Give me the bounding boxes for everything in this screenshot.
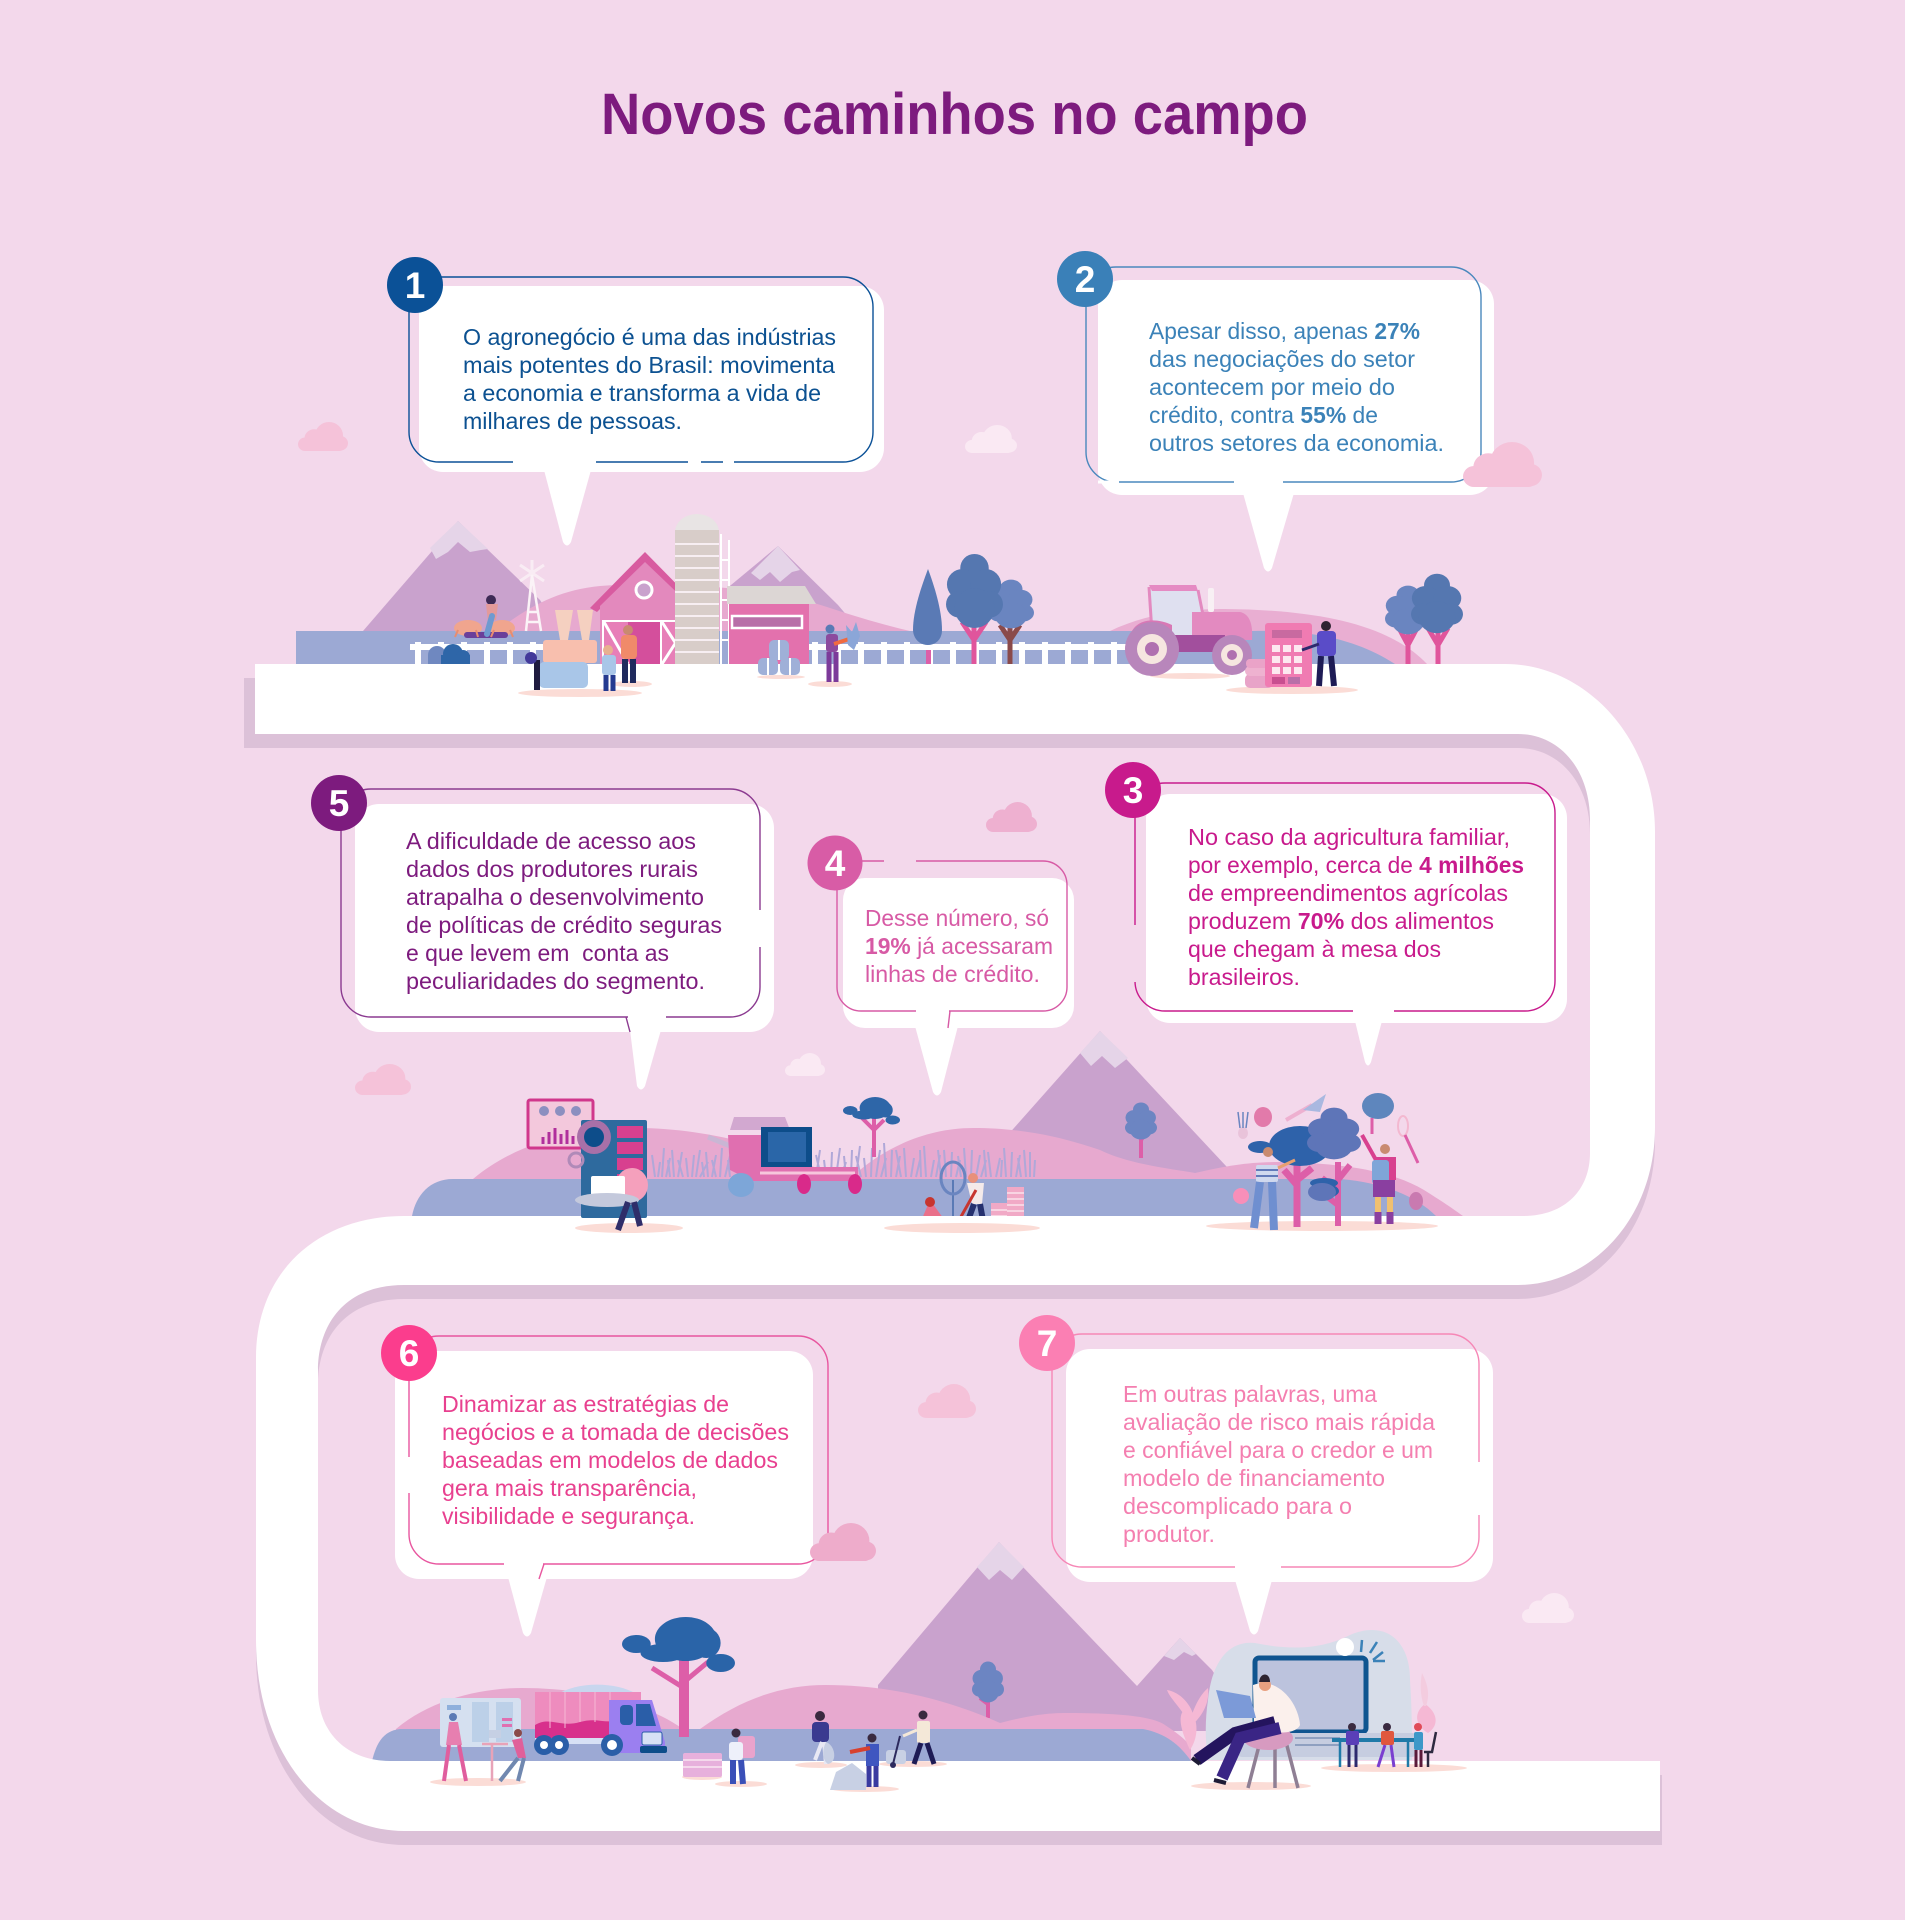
- callout text: produzem 70% dos alimentos: [1188, 908, 1494, 934]
- number badge: [381, 1325, 437, 1381]
- callout text: por exemplo, cerca de 4 milhões: [1188, 852, 1524, 878]
- cloud over callout 2: [1463, 442, 1542, 487]
- hay bales: [758, 640, 800, 675]
- bubble outline: [837, 861, 1067, 1011]
- callout text: 19% já acessaram: [865, 933, 1053, 959]
- bubble outline: [409, 1336, 828, 1564]
- pigs and woman: [454, 595, 515, 638]
- bubble tail: [915, 1026, 958, 1096]
- callout text: a economia e transforma a vida de: [463, 380, 821, 406]
- callout text: Em outras palavras, uma: [1123, 1381, 1378, 1407]
- bubble tail: [630, 1030, 661, 1090]
- callout text: [463, 324, 836, 434]
- number badge: [1105, 762, 1161, 818]
- bubble outline: [341, 789, 760, 1017]
- cloud over callout 6: [810, 1523, 876, 1561]
- crate and worker: [683, 1728, 755, 1784]
- hill behind tractor: [1110, 609, 1427, 664]
- callout text: e que levem em conta as: [406, 940, 669, 966]
- callout text: O agronegócio é uma das indústrias: [463, 324, 836, 350]
- figures scene 2: data center: [528, 1100, 648, 1230]
- callout text: gera mais transparência,: [442, 1475, 697, 1501]
- tail notch: [539, 1564, 544, 1579]
- outline gaps: [1098, 480, 1283, 484]
- callout text: das negociações do setor: [1149, 346, 1415, 372]
- callout text: negócios e a tomada de decisões: [442, 1419, 789, 1445]
- figures scene 1: milk machine and workers: [525, 610, 637, 691]
- landscape scene 2: fields: [412, 1031, 1463, 1230]
- number badge: [1057, 251, 1113, 307]
- callout text: [1123, 1381, 1436, 1547]
- number badge: 2: [1075, 259, 1095, 300]
- callout text: Desse número, só: [865, 905, 1049, 931]
- callout text: Apesar disso, apenas 27%: [1149, 318, 1420, 344]
- callout text: e confiável para o credor e um: [1123, 1437, 1433, 1463]
- number badge: 4: [825, 843, 846, 884]
- callout text: produtor.: [1123, 1521, 1215, 1547]
- monitor: [1255, 1638, 1385, 1732]
- blob behind laptop man: [1206, 1630, 1412, 1760]
- outline gaps: [1235, 1462, 1479, 1567]
- callout text: visibilidade e segurança.: [442, 1503, 695, 1529]
- number badge: 1: [405, 265, 425, 306]
- landscape scene 1: farm: [296, 514, 1463, 664]
- callout text: Dinamizar as estratégias de: [442, 1391, 729, 1417]
- bubble tail: [544, 470, 591, 546]
- number badge: [387, 257, 443, 313]
- bush: [428, 644, 470, 664]
- board: [440, 1698, 521, 1747]
- number badge: 6: [399, 1333, 419, 1374]
- callout text: [406, 828, 722, 994]
- bubble body: [1098, 280, 1494, 495]
- bubble body: [355, 804, 774, 1032]
- callout text: [1149, 318, 1444, 456]
- callout text: de políticas de crédito seguras: [406, 912, 722, 938]
- orchard trees and pickers: [1248, 1108, 1396, 1230]
- silo: [675, 514, 729, 664]
- team table: [1332, 1723, 1436, 1767]
- outline gaps: [409, 1457, 543, 1564]
- callout text: [442, 1391, 789, 1529]
- bubble outline: [409, 277, 873, 462]
- ground band: [372, 1729, 1191, 1761]
- mountain: [990, 1031, 1240, 1179]
- keyboard: [1238, 1733, 1416, 1757]
- title: Novos caminhos no campo: [601, 82, 1308, 147]
- hills: [396, 1685, 1191, 1761]
- callout text: outros setores da economia.: [1149, 430, 1444, 456]
- bubble outline: [1052, 1334, 1479, 1567]
- windmill: [520, 560, 544, 631]
- bottom gap: [1353, 1010, 1394, 1012]
- callout text: brasileiros.: [1188, 964, 1300, 990]
- outline gaps: [884, 860, 916, 862]
- callout text: que chegam à mesa dos: [1188, 936, 1441, 962]
- callout text: milhares de pessoas.: [463, 408, 682, 434]
- ground shadows under figures: [430, 673, 1467, 1792]
- ground band: [296, 631, 1395, 664]
- number badge: [808, 836, 862, 890]
- bottom gap: [916, 1010, 949, 1012]
- orchard hill fruit: [1233, 1093, 1423, 1210]
- callout text: modelo de financiamento: [1123, 1465, 1385, 1491]
- callout text: [1188, 824, 1524, 990]
- barn: [590, 552, 700, 664]
- callout text: crédito, contra 55% de: [1149, 402, 1378, 428]
- mountain left: [363, 521, 560, 631]
- bubble tail: [508, 1577, 547, 1636]
- side barn: [727, 586, 816, 664]
- callout text: atrapalha o desenvolvimento: [406, 884, 704, 910]
- ground band: [412, 1179, 1436, 1216]
- bubble body: [1146, 794, 1567, 1023]
- callout 7: [1019, 1315, 1493, 1634]
- outline gaps: [513, 460, 734, 464]
- callout text: peculiaridades do segmento.: [406, 968, 705, 994]
- callout text: acontecem por meio do: [1149, 374, 1395, 400]
- callout 2: [1057, 251, 1494, 572]
- callout 4: [808, 836, 1074, 1096]
- bubble body: [843, 878, 1074, 1028]
- bubble tail: [1243, 493, 1294, 572]
- mountain right: [725, 546, 860, 631]
- road: [255, 664, 1660, 1831]
- number badge: [311, 775, 367, 831]
- road shadow: [244, 678, 1662, 1845]
- callout text: [865, 905, 1053, 987]
- hill behind barn: [497, 584, 910, 631]
- small tree: [972, 1662, 1004, 1718]
- bubble body: [1066, 1349, 1493, 1582]
- landscape scene 3: logistics: [372, 1542, 1416, 1761]
- calculator and investor: [1245, 621, 1336, 688]
- callout text: de empreendimentos agrícolas: [1188, 880, 1508, 906]
- tail notch: [626, 1017, 630, 1032]
- tree pair: [946, 554, 1034, 664]
- callout 3: [1105, 762, 1567, 1066]
- callout text: descomplicado para o: [1123, 1493, 1352, 1519]
- bubble tail: [1355, 1021, 1382, 1066]
- grass: [652, 1143, 1035, 1177]
- fence left: [410, 642, 1126, 664]
- number badge: 5: [329, 783, 349, 824]
- tall tree: [913, 569, 942, 664]
- background clouds: [298, 422, 1574, 1623]
- bubble outline: [1086, 267, 1481, 482]
- callout text: linhas de crédito.: [865, 961, 1040, 987]
- outline gaps: [628, 910, 760, 1017]
- bubble body: [419, 286, 884, 472]
- big pine: [622, 1617, 735, 1737]
- tree: [843, 1097, 900, 1157]
- callout 6: [381, 1325, 828, 1636]
- plants: [1167, 1673, 1436, 1750]
- laptop man: [1192, 1674, 1300, 1788]
- bubble body: [395, 1351, 813, 1579]
- harvester: [708, 1117, 862, 1197]
- tree pair right: [1385, 574, 1463, 664]
- callout text: dados dos produtores rurais: [406, 856, 698, 882]
- callout 5: [311, 775, 774, 1090]
- hills: [473, 1128, 1463, 1216]
- bubble tail: [1235, 1580, 1272, 1634]
- tractor: [1125, 585, 1252, 676]
- mountains: [878, 1542, 1245, 1731]
- planting people: [918, 1162, 1024, 1230]
- tail notch: [948, 1011, 950, 1028]
- callout text: A dificuldade de acesso aos: [406, 828, 696, 854]
- callout text: mais potentes do Brasil: movimenta: [463, 352, 836, 378]
- callout text: avaliação de risco mais rápida: [1123, 1409, 1436, 1435]
- outline gaps: [1134, 925, 1136, 982]
- bubble outline: [1135, 783, 1555, 1011]
- truck: [534, 1685, 667, 1756]
- callout text: No caso da agricultura familiar,: [1188, 824, 1510, 850]
- callout 1: [387, 257, 884, 546]
- callout text: baseadas em modelos de dados: [442, 1447, 778, 1473]
- number badge: [1019, 1315, 1075, 1371]
- small tree on mountain: [1125, 1102, 1157, 1158]
- number badge: 3: [1123, 770, 1143, 811]
- sack workers: [812, 1710, 934, 1790]
- number badge: 7: [1037, 1323, 1057, 1364]
- figures scene 3: planners: [444, 1713, 526, 1781]
- farmer with plant: [826, 622, 860, 682]
